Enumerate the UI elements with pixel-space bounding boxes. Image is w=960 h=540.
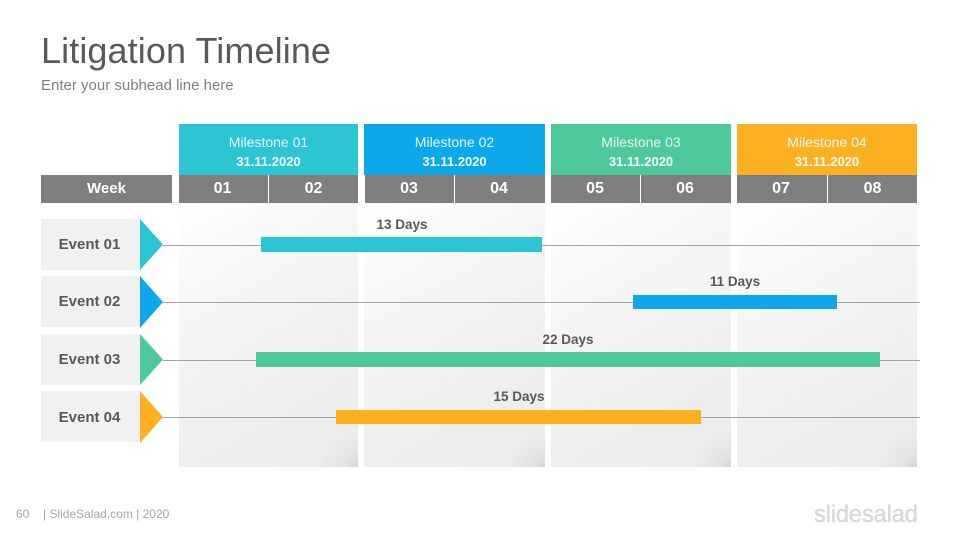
event 02 label: Event 02 <box>59 293 120 310</box>
milestone 02 header: 31.11.2020 <box>422 154 487 169</box>
event 02 arrow <box>140 276 163 328</box>
milestone 03 header: 31.11.2020 <box>609 154 673 169</box>
milestone 01 header: 31.11.2020 <box>236 154 301 169</box>
brand logo wordmark: slidesalad <box>814 501 918 528</box>
week 04: 04 <box>490 180 508 197</box>
milestone 02 header <box>364 124 545 175</box>
event 03 label <box>41 334 140 385</box>
milestone 04 header: 31.11.2020 <box>795 154 859 169</box>
bar: event 04 <box>336 410 701 424</box>
bar: event 03 <box>256 352 880 367</box>
week 07: 07 <box>772 180 790 197</box>
week 05: 05 <box>586 180 604 197</box>
week 08: 08 <box>864 180 881 197</box>
week 01 <box>179 175 268 203</box>
week 04 <box>455 175 545 203</box>
milestone 04 header <box>737 124 917 175</box>
week 02: 02 <box>305 180 322 197</box>
event 01 label: Event 01 <box>59 236 120 253</box>
panel: column background 2 <box>364 203 545 467</box>
week 08 <box>828 175 917 203</box>
event 04 label <box>41 391 140 442</box>
milestone 04 header: Milestone 04 <box>787 134 867 150</box>
milestone 02 header: Milestone 02 <box>415 134 494 150</box>
event 04 label: Event 04 <box>59 409 120 426</box>
panel: column background 1 <box>179 203 358 467</box>
week 05 <box>551 175 640 203</box>
week label: Week <box>87 180 126 197</box>
duration label: 11 days: 11 Days <box>710 274 760 289</box>
milestone 03 header <box>551 124 731 175</box>
title: Litigation Timeline <box>41 30 331 71</box>
panel: column background 3 <box>551 203 731 467</box>
timeline line: event 01 <box>163 245 920 246</box>
footer page number: 60 <box>16 507 29 521</box>
duration label: 22 days: 22 Days <box>542 332 594 347</box>
subtitle: Enter your subhead line here <box>41 77 234 94</box>
week 06 <box>641 175 731 203</box>
event 04 arrow <box>140 391 163 443</box>
week 06: 06 <box>676 180 694 197</box>
bar: event 02 <box>633 295 837 309</box>
week 07 <box>737 175 827 203</box>
timeline line: event 04 <box>163 417 920 418</box>
week 01: 01 <box>214 180 231 197</box>
milestone 03 header: Milestone 03 <box>601 134 681 150</box>
timeline line: event 03 <box>163 360 920 361</box>
timeline line: event 02 <box>163 302 920 303</box>
duration label: 13 days: 13 Days <box>376 217 428 232</box>
footer source text: | SlideSalad.com | 2020 <box>43 507 169 521</box>
week 03: 03 <box>400 180 418 197</box>
milestone 01 header <box>179 124 358 175</box>
event 01 label <box>41 219 140 270</box>
event 03 arrow <box>140 334 163 385</box>
milestone 01 header: Milestone 01 <box>229 134 308 150</box>
bar: event 01 <box>261 237 542 252</box>
duration label: 15 days: 15 Days <box>493 389 545 404</box>
panel: column background 4 <box>737 203 917 467</box>
week 03 <box>365 175 454 203</box>
event 01 arrow <box>140 219 163 270</box>
week 02 <box>269 175 358 203</box>
week label <box>41 175 172 203</box>
event 02 label <box>41 276 140 327</box>
event 03 label: Event 03 <box>59 351 120 368</box>
